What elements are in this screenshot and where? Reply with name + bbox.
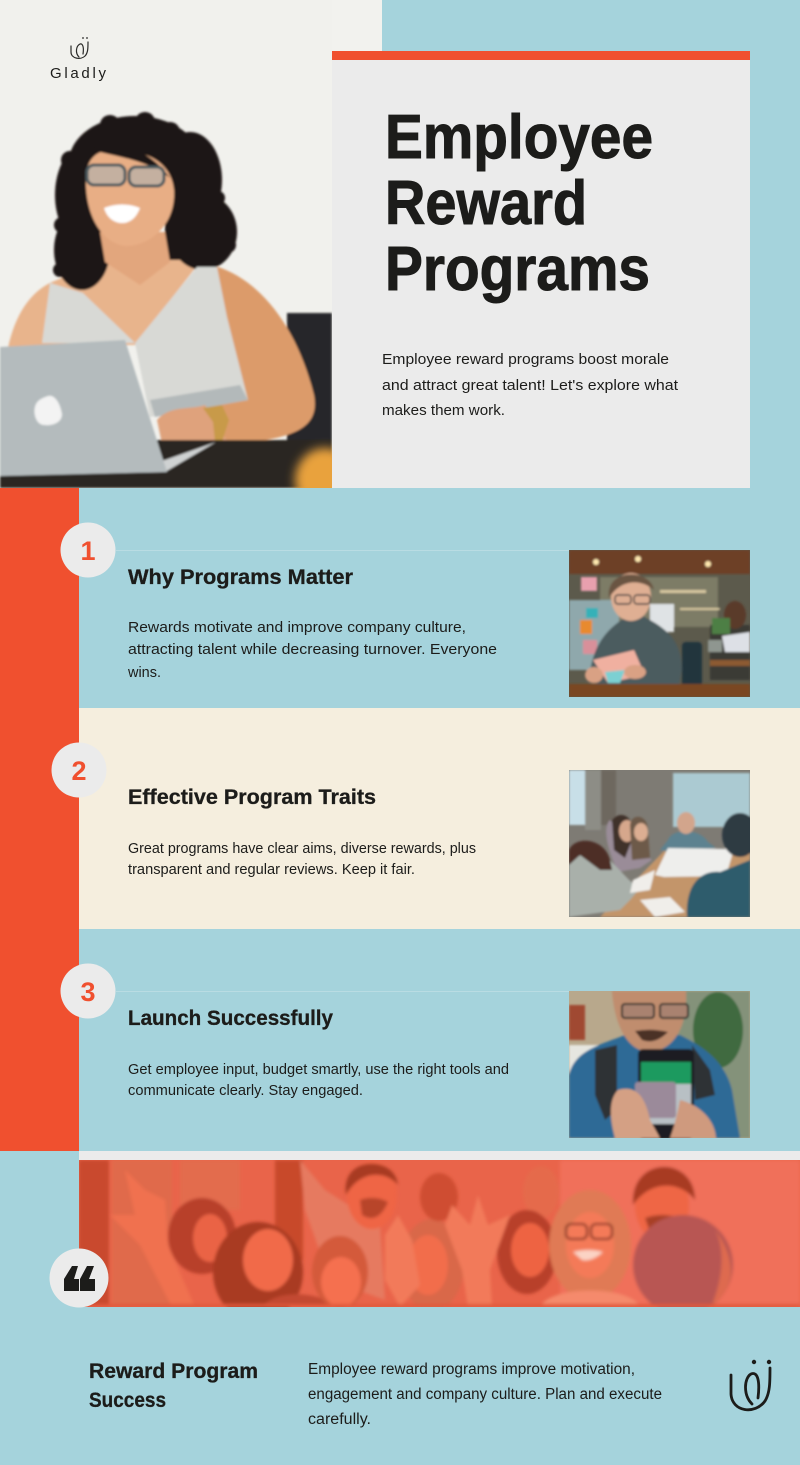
red left column [0,488,79,1151]
panel: section 2 background [79,708,800,929]
girl [312,1236,368,1308]
body 2: transparent and regular reviews. Keep it fair. [128,862,415,878]
title: Programs [385,235,650,304]
hero backdrop [0,0,382,52]
face [86,150,174,246]
badge 2: 2 [71,756,87,786]
woman center left [213,1222,303,1322]
neck shadow [100,232,170,285]
right man [634,1184,690,1232]
title: Employee [385,103,653,172]
footer heading [89,1359,258,1412]
body 1 [127,620,497,681]
Gladly logo [50,37,106,82]
panel: hero title card [332,51,750,488]
badge 1 [60,522,116,578]
curly hair [53,112,237,290]
laptop [0,340,167,476]
badge 3: 3 [80,977,96,1007]
hands [445,1195,510,1307]
footer logo icon [731,1360,771,1410]
footer text: Employee reward programs improve motivation, [308,1361,635,1378]
intro text: and attract great talent! Let's explore what [382,377,679,394]
body 1: Rewards motivate and improve company culture, [128,620,466,636]
body 2: Great programs have clear aims, diverse rewards, plus [128,841,476,857]
section 3 [60,964,750,1139]
badge 1: 1 [80,536,96,566]
footer text: engagement and company culture. Plan and execute [308,1386,662,1403]
section 1 [60,522,750,697]
photo: smiling employee with brochure [569,550,750,697]
quote badge [50,1248,108,1308]
logo mark [71,42,88,58]
photo: team meeting around table [569,770,758,917]
logo wordmark: Gladly [50,65,106,82]
balloon [633,1215,733,1315]
intro text: makes them work. [382,402,505,419]
heading 2: Effective Program Traits [128,786,376,809]
footer text: carefully. [308,1411,371,1428]
body 3: Get employee input, budget smartly, use the right tools and [128,1062,509,1078]
badge 3 [60,964,116,1018]
arms and chest [7,258,196,348]
hand and watch [156,404,226,442]
title: Reward [385,169,587,238]
section 2 [52,742,758,917]
speckled dress [42,267,248,417]
body 3: communicate clearly. Stay engaged. [128,1083,363,1099]
raised arm [113,1174,192,1304]
quote mark [64,1266,95,1291]
heading 3: Launch Successfully [128,1007,333,1030]
footer heading: Reward Program [89,1359,258,1383]
footer text [308,1361,662,1428]
intro text: Employee reward programs boost morale [382,351,669,368]
photo: man checking rewards app on phone [569,991,750,1139]
red accent bar [332,51,750,60]
title [385,103,653,304]
heading 1: Why Programs Matter [128,566,353,589]
gray strip above banner [79,1151,800,1160]
footer heading: Success [89,1388,166,1412]
body 2 [128,841,476,878]
badge 2 [52,742,106,798]
shirt of top man [300,1160,385,1300]
center woman [410,1220,463,1304]
body 1: wins. [127,665,161,681]
intro text [382,351,679,419]
glasses woman [549,1190,631,1300]
woman back left [168,1198,236,1274]
body 3 [128,1062,509,1099]
hero photo: laughing woman at laptop [0,52,332,488]
dark-haired woman right [497,1210,557,1294]
banner photo: celebrating team with orange tint [79,1160,800,1322]
body 1: attracting talent while decreasing turnover. Everyone [128,642,497,658]
table [0,440,332,488]
top man [348,1204,381,1230]
